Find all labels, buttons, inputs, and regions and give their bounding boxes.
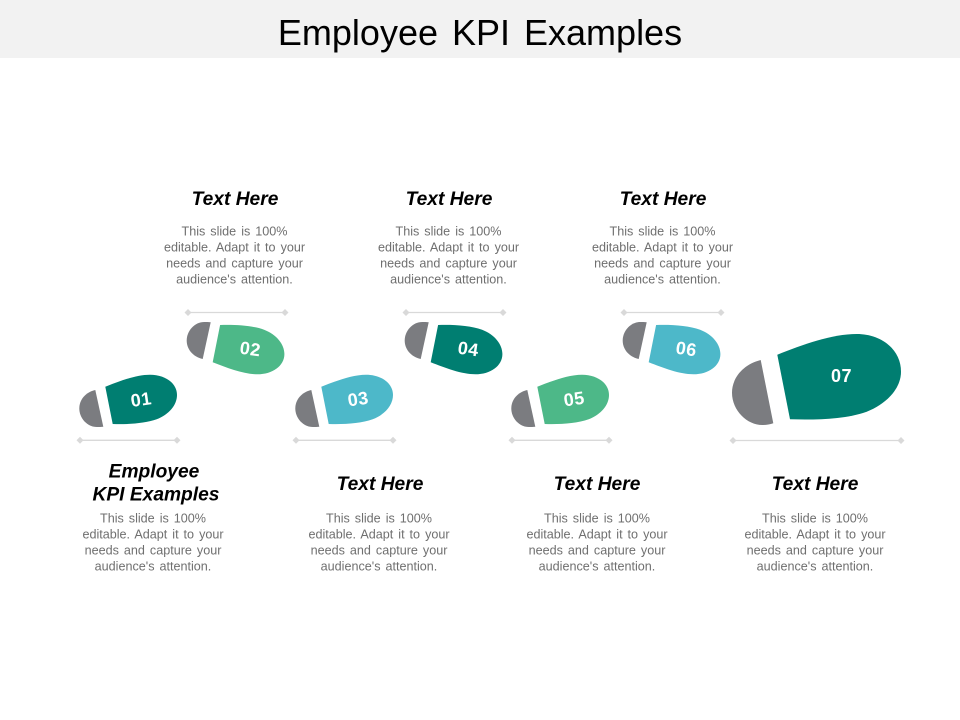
step 02: text block: [164, 189, 305, 286]
step 02: footprint: [187, 322, 284, 374]
step 04: divider: [402, 309, 506, 316]
step 04: footprint: 04: [457, 338, 480, 360]
step 07: text block: This slide is 100%: [762, 512, 868, 526]
step 03: text block: audience's attention.: [321, 560, 437, 574]
step 03: text block: [308, 474, 450, 574]
step 03: text block: editable. Adapt it to your: [308, 528, 450, 542]
step 07: text block: needs and capture your: [747, 544, 883, 558]
step 03: text block: This slide is 100%: [326, 512, 432, 526]
step 04: text block: needs and capture your: [380, 256, 517, 270]
step 03: text block: needs and capture your: [311, 544, 447, 558]
title: Employee KPI Examples: [278, 12, 682, 53]
step 07: large footprint: 07: [831, 366, 852, 386]
step 06: text block: This slide is 100%: [610, 224, 716, 238]
title band: [0, 0, 960, 58]
step 05: text block: needs and capture your: [529, 544, 665, 558]
step 06: divider: [620, 309, 724, 316]
step 03: text block: Text Here: [337, 474, 424, 495]
step 01: text block: This slide is 100%: [100, 512, 206, 526]
step 06: text block: audience's attention.: [604, 272, 721, 286]
step 07: text block: editable. Adapt it to your: [744, 528, 886, 542]
step 05: text block: Text Here: [554, 474, 641, 495]
step 01: text block: [82, 462, 224, 574]
step 05: text block: audience's attention.: [539, 560, 655, 574]
step 07: text block: Text Here: [772, 474, 859, 495]
step 05: text block: [526, 474, 668, 574]
step 06: footprint: 06: [675, 338, 698, 360]
step 01: divider: [76, 437, 180, 444]
step 06: text block: [592, 189, 733, 286]
step 07: text block: audience's attention.: [757, 560, 873, 574]
step 02: text block: This slide is 100%: [182, 224, 288, 238]
step 05: text block: This slide is 100%: [544, 512, 650, 526]
step 01: text block: editable. Adapt it to your: [82, 528, 224, 542]
step 04: text block: Text Here: [406, 189, 493, 210]
step 04: text block: audience's attention.: [390, 272, 507, 286]
step 05: footprint: 05: [562, 388, 586, 410]
step 03: footprint: 03: [346, 388, 370, 410]
step 01: text block: needs and capture your: [85, 544, 221, 558]
step 05: footprint: [511, 375, 609, 427]
step 02: text block: Text Here: [192, 189, 279, 210]
step 06: text block: editable. Adapt it to your: [592, 240, 733, 254]
step 01: text block: Employee: [109, 462, 200, 482]
step 05: divider: [508, 437, 612, 444]
step 07: large footprint: [732, 334, 901, 425]
step 07: divider: [730, 437, 904, 444]
step 03: divider: [292, 437, 396, 444]
step 02: text block: editable. Adapt it to your: [164, 240, 305, 254]
step 07: text block: [744, 474, 886, 574]
step 02: text block: audience's attention.: [176, 272, 293, 286]
step 02: divider: [184, 309, 288, 316]
step 04: text block: This slide is 100%: [396, 224, 502, 238]
step 01: footprint: [79, 375, 177, 427]
step 02: footprint: 02: [239, 338, 262, 360]
step 01: footprint: 01: [129, 388, 153, 411]
step 06: text block: Text Here: [620, 189, 707, 210]
step 04: footprint: [405, 322, 502, 374]
step 05: text block: editable. Adapt it to your: [526, 528, 668, 542]
step 06: footprint: [623, 322, 720, 374]
step 03: footprint: [295, 375, 393, 427]
step 04: text block: [378, 189, 519, 286]
step 04: text block: editable. Adapt it to your: [378, 240, 519, 254]
step 01: text block: audience's attention.: [95, 560, 211, 574]
step 02: text block: needs and capture your: [166, 256, 303, 270]
step 01: text block: KPI Examples: [93, 484, 220, 506]
step 06: text block: needs and capture your: [594, 256, 731, 270]
